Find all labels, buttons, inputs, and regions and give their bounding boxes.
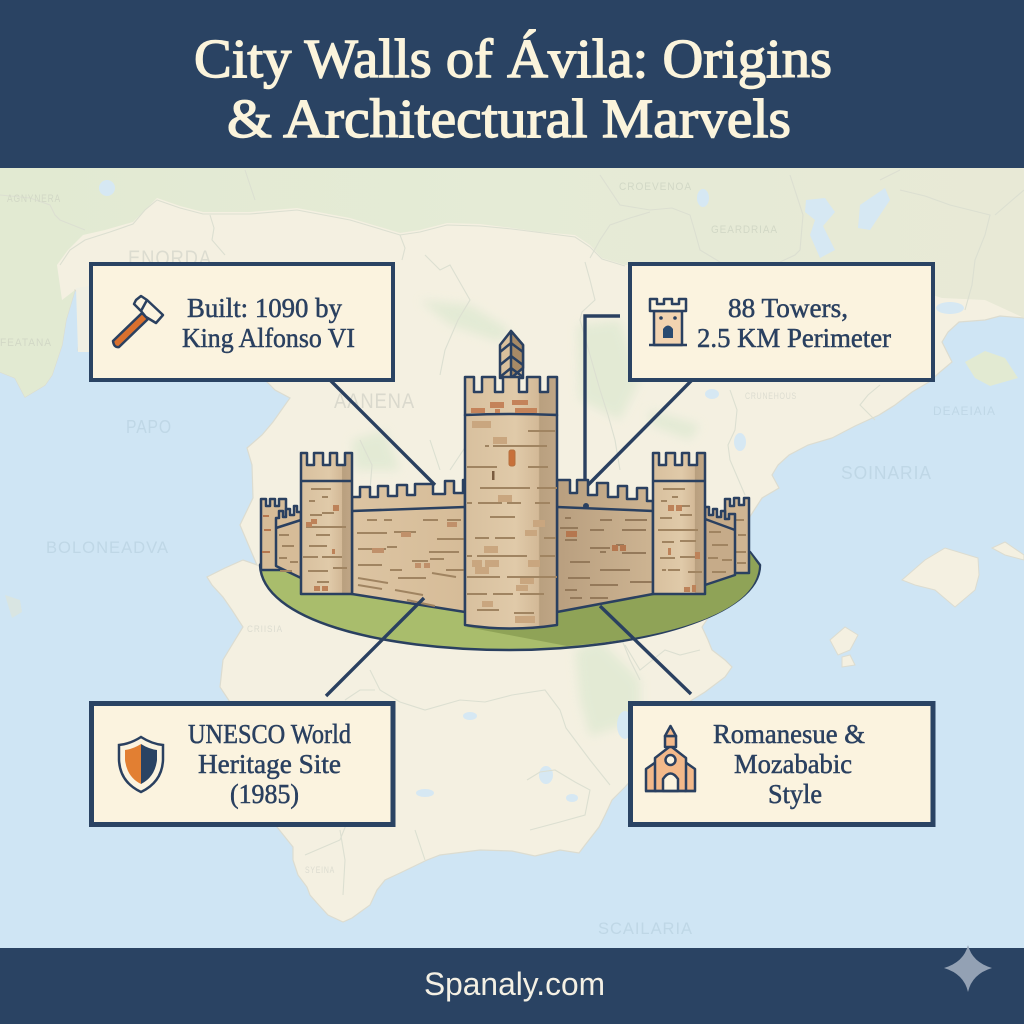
map: faint place names: GEARDRIAA [711,224,778,236]
footer band [0,948,1024,1024]
map: faint place names: CRUNEHOUS [745,391,797,401]
card: unesco: Heritage Site [198,749,341,779]
far left tower [261,499,286,570]
central tower [465,377,557,628]
map: soft green patches [352,300,700,736]
text: built: Built: 1090 by [187,293,342,323]
card: style [630,704,933,824]
icon: hammer [113,296,163,347]
left curtain wall [352,480,468,612]
icon: sparkle [944,945,992,992]
card: style: Style [768,779,822,809]
footer text: Spanaly.com [424,966,605,1002]
ground shadow [467,553,759,646]
map: faint place names: ENORDA [128,247,212,270]
title [194,28,832,149]
lower leader lines [326,598,691,696]
castle illustration [260,331,760,650]
map: faint place names: SOINARIA [841,463,932,483]
map: lakes [99,180,964,802]
map: faint place names: AGNYNERA [7,193,61,205]
right curtain wall [557,480,653,612]
text: towers: 88 Towers, [728,293,848,323]
map: rivers and borders [0,170,1024,895]
card: style: Mozababic [734,749,852,779]
icon: tower [649,299,687,345]
icon: shield [119,737,163,792]
map: faint place names [0,181,996,938]
text: unesco: UNESCO World [188,719,351,749]
central tower spire [500,331,523,378]
map: faint place names: CRIISIA [247,624,283,634]
header band [0,0,1024,168]
map: faint place names: BOLONEADVA [46,538,169,557]
map: land masses [0,168,1024,922]
map: faint place names: DEAEIAIA [933,404,996,418]
title: City Walls of Ávila: Origins [194,28,832,89]
map: faint place names: PAPO [126,417,172,437]
map: faint place names: FEATANA [0,337,52,349]
wall junction dot [583,503,589,509]
text: style: Romanesue & [713,719,865,749]
right tower [653,453,705,594]
far left wall [276,506,301,578]
card: towers: 2.5 KM Perimeter [697,323,891,353]
card: built: King Alfonso VI [182,323,355,353]
far right tower [725,498,749,573]
ground ellipse [260,552,760,650]
far right wall [705,507,735,585]
upper leader lines [330,316,692,506]
map background: sea [0,168,1024,948]
map: faint place names: SYEINA [305,865,335,875]
map: faint place names: AANENA [334,390,415,413]
map: faint place names: SCAILARIA [598,919,693,938]
left tower [301,453,352,594]
title: & Architectural Marvels [227,88,791,149]
icon: church [645,726,696,791]
card: unesco [92,704,393,824]
card: towers [630,264,933,380]
card: built [91,264,393,380]
map: faint place names: CROEVENOA [619,181,692,193]
card: unesco: (1985) [230,779,299,809]
